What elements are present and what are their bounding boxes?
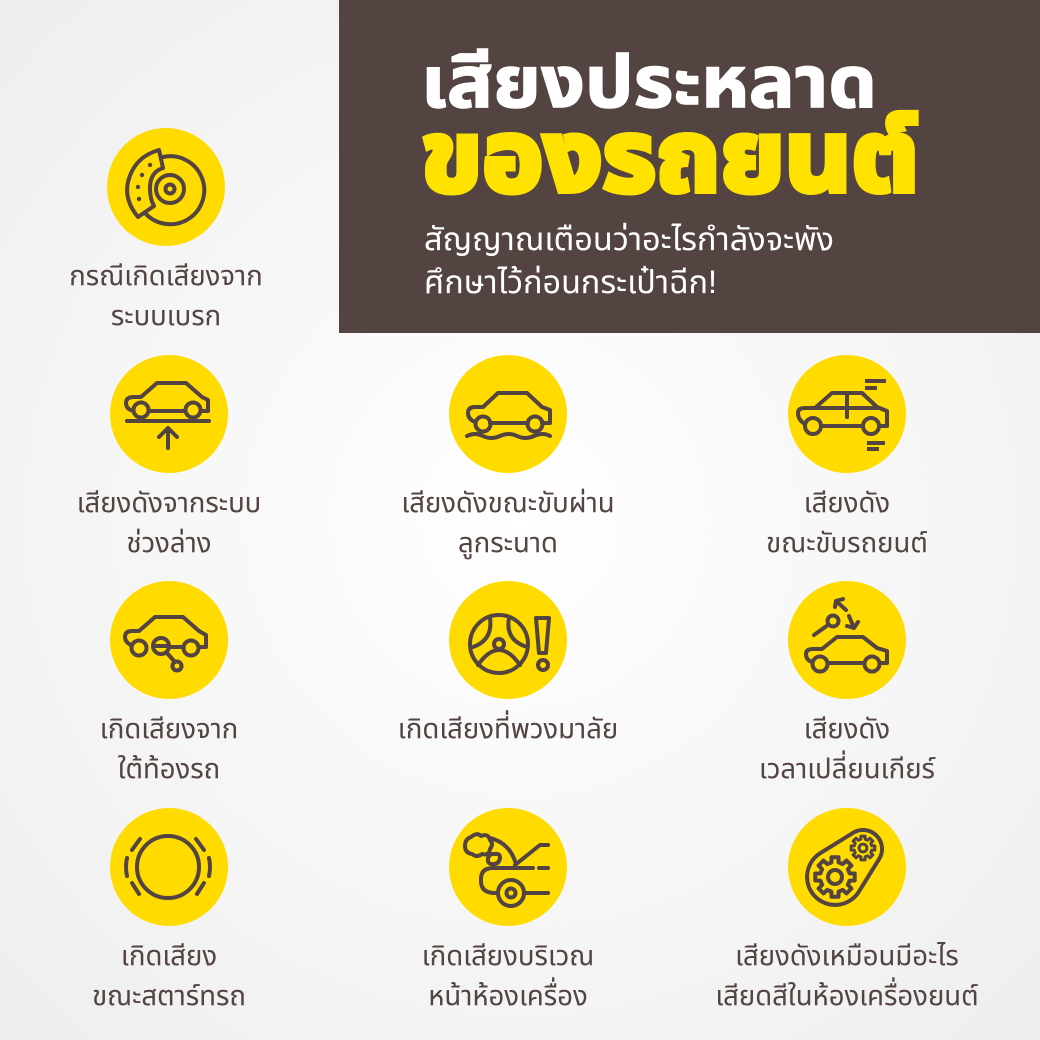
label: ขณะขับรถยนต์ — [766, 527, 928, 558]
icon: timing belt with gears — [807, 830, 882, 905]
icon: tyre with brake marks — [126, 836, 210, 898]
label — [766, 487, 928, 558]
subtitle line 1: สัญญาณเตือนว่าอะไรกำลังจะพัง — [424, 221, 834, 257]
item: under car — [100, 581, 238, 784]
label: เสียงดังจากระบบ — [77, 487, 261, 518]
icon: car with speed lines — [798, 381, 887, 449]
label: เกิดเสียง — [121, 940, 217, 971]
label: เสียงดังเหมือนมีอะไร — [735, 940, 959, 971]
icon: car on lift — [126, 383, 209, 448]
label: ระบบเบรก — [111, 300, 221, 331]
label: ลูกระนาด — [458, 527, 558, 559]
label: เสียงดัง — [804, 487, 890, 518]
icon: car on bumps — [467, 393, 550, 438]
label — [759, 713, 936, 784]
item: suspension — [77, 355, 261, 558]
label: เกิดเสียงจาก — [100, 713, 238, 744]
label — [69, 260, 263, 331]
label — [77, 487, 261, 558]
label: เสียงดัง — [804, 713, 890, 744]
label: ใต้ท้องรถ — [118, 753, 220, 784]
item: speed bump — [401, 355, 615, 559]
label — [422, 940, 594, 1011]
icon: open bonnet with smoke — [465, 834, 548, 906]
label: เวลาเปลี่ยนเกียร์ — [759, 750, 936, 784]
icon: car with gear shift — [806, 599, 887, 672]
label: ขณะสตาร์ทรถ — [92, 980, 246, 1011]
item: steering wheel — [398, 581, 618, 744]
label — [401, 487, 615, 559]
icon: car with underbody marker — [125, 617, 206, 670]
label: เสียดสีในห้องเครื่องยนต์ — [715, 977, 979, 1011]
label — [92, 940, 246, 1011]
panel: header — [339, 0, 1040, 333]
label: เกิดเสียงที่พวงมาลัย — [398, 710, 618, 744]
item: engine bay — [422, 808, 594, 1011]
label: กรณีเกิดเสียงจาก — [69, 260, 263, 291]
title line 2: ของรถยนต์ — [421, 101, 919, 213]
item: belt — [715, 808, 979, 1011]
icon: brake disc — [127, 150, 204, 224]
label: หน้าห้องเครื่อง — [428, 977, 588, 1011]
label — [715, 940, 979, 1011]
label: เกิดเสียงบริเวณ — [422, 940, 594, 971]
item: while driving — [766, 355, 928, 558]
item: brake — [69, 128, 263, 331]
title line 1: เสียงประหลาด — [421, 43, 877, 123]
item: gear change — [759, 581, 936, 784]
icon: steering wheel with exclamation — [470, 615, 549, 673]
item: on start — [92, 808, 246, 1011]
label — [100, 713, 238, 784]
label: เสียงดังขณะขับผ่าน — [401, 487, 615, 518]
subtitle line 2: ศึกษาไว้ก่อนกระเป๋าฉีก! — [424, 264, 717, 300]
label: ช่วงล่าง — [126, 527, 212, 558]
